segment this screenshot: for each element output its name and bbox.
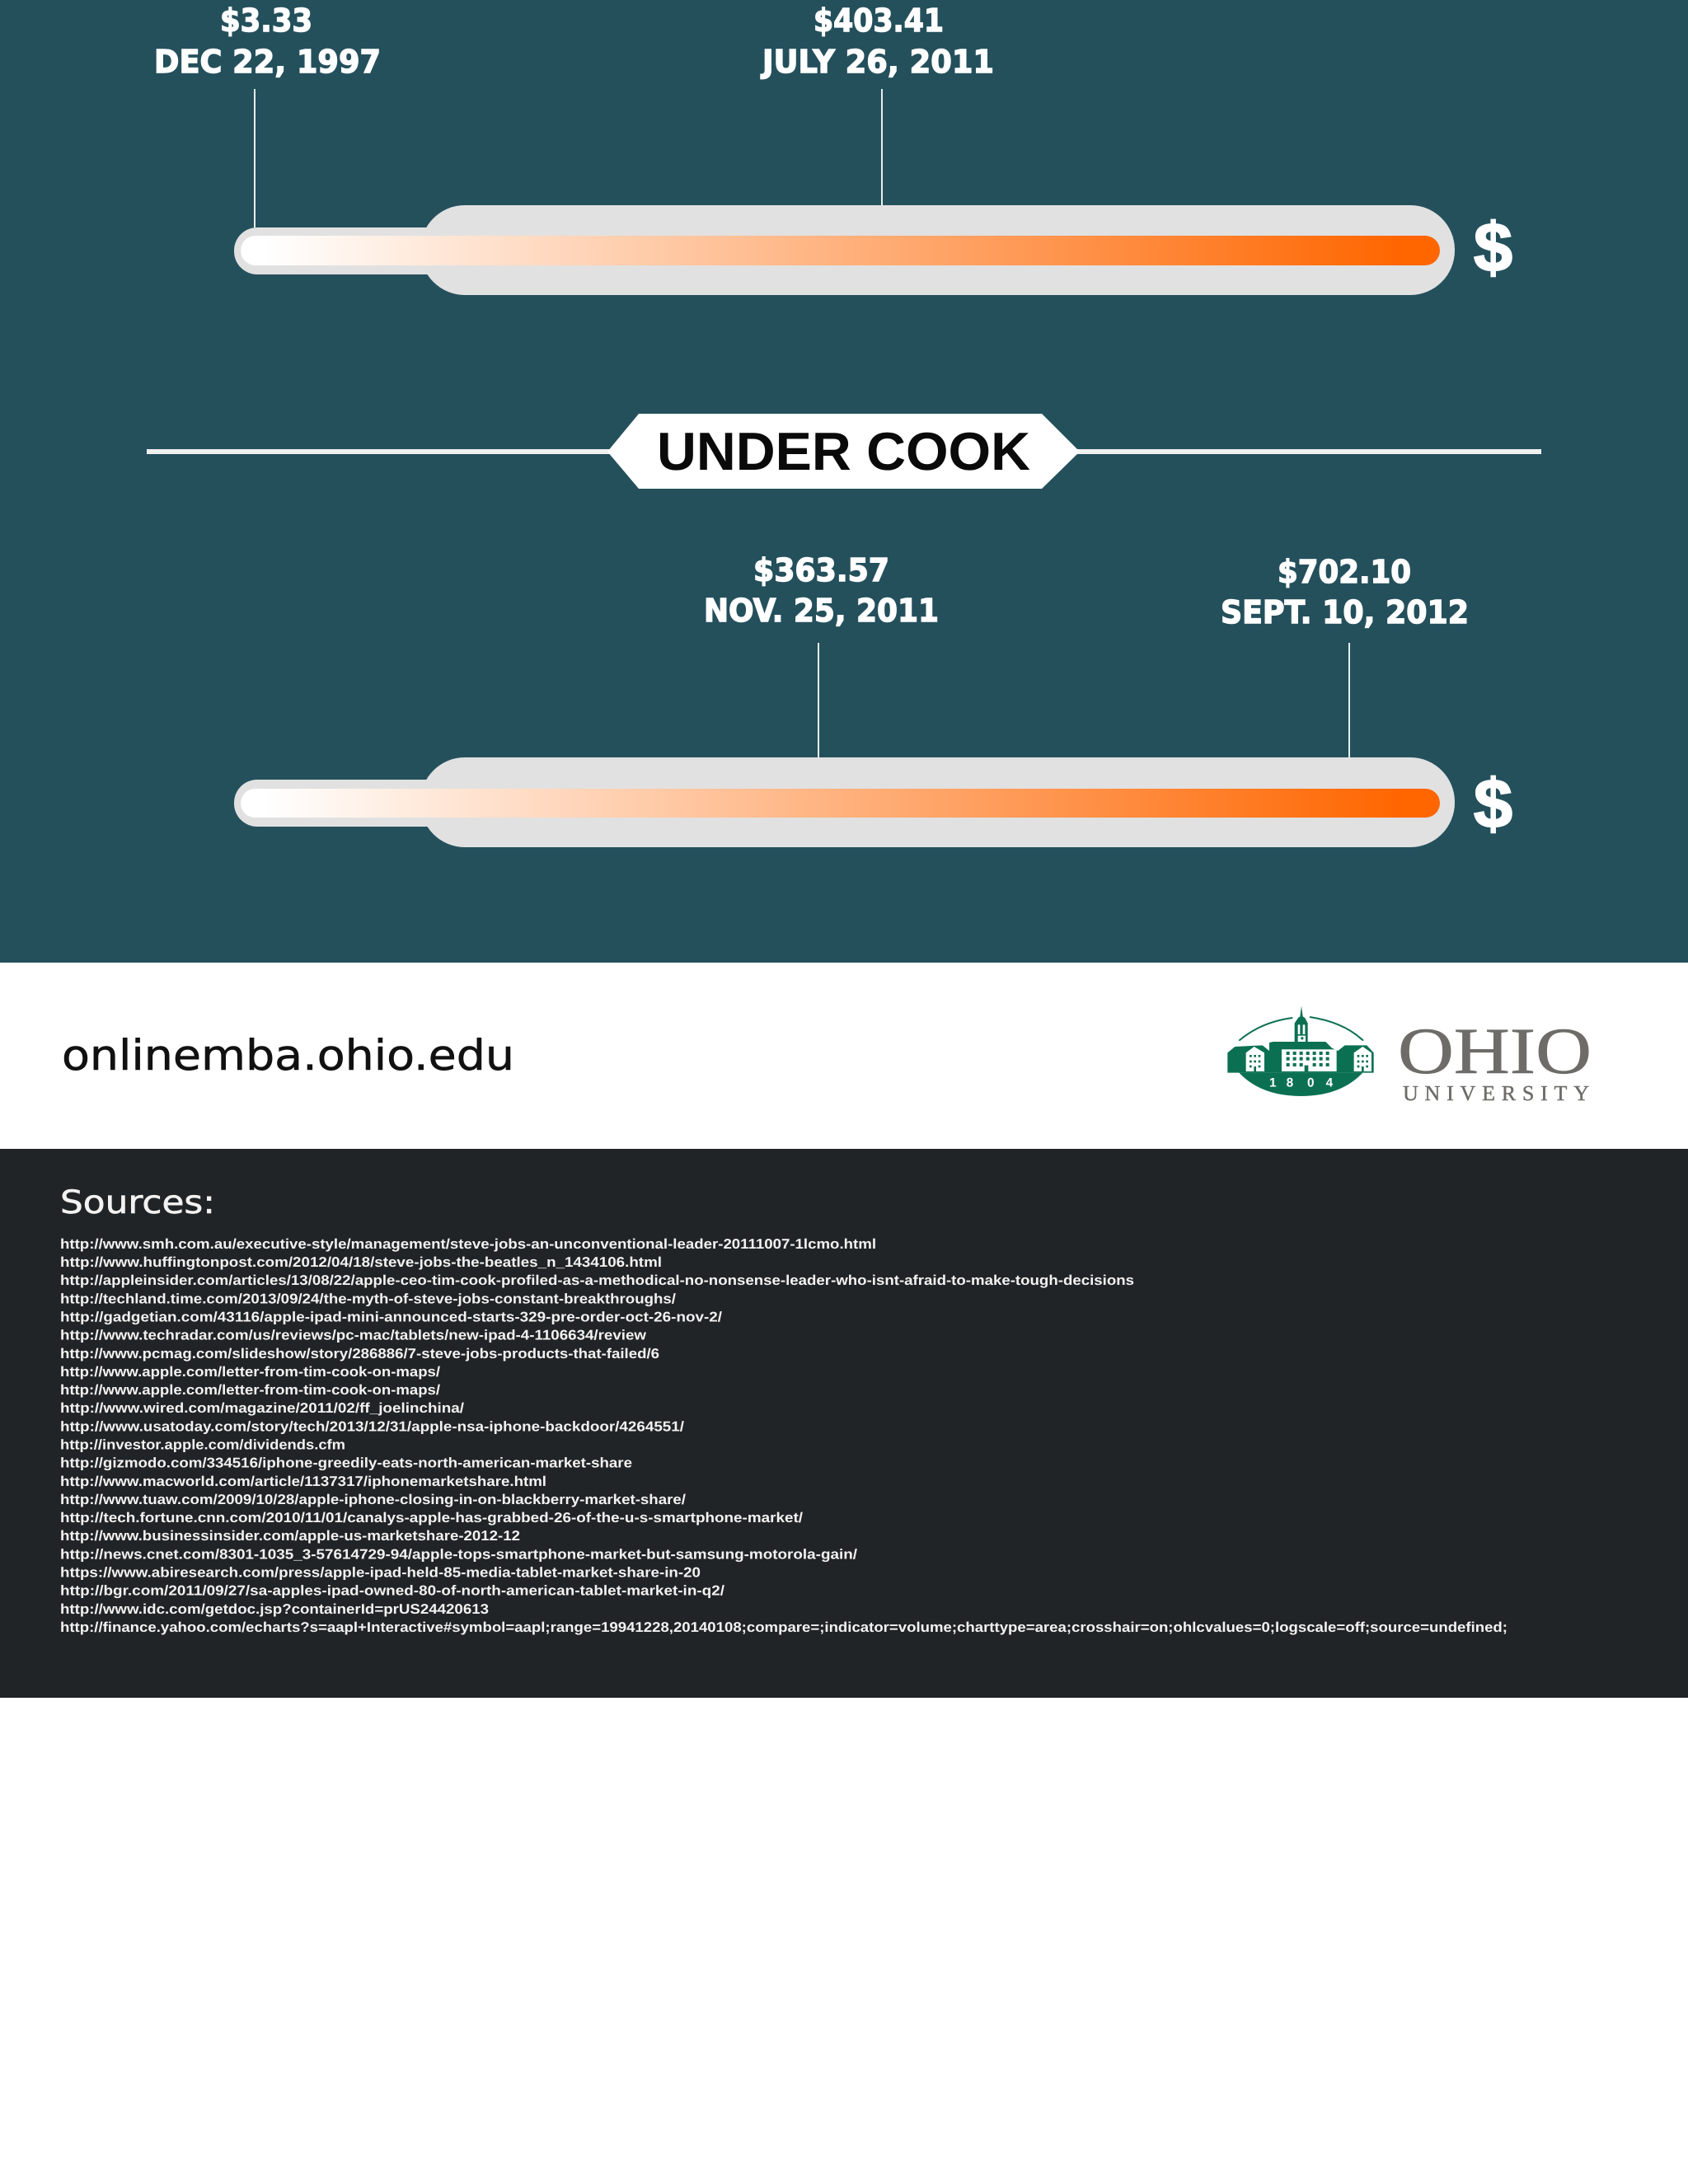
label: $3.33 Dec 22, 1997 [154,2,381,81]
list of source links: http://finance.yahoo.com/echarts?s=aapl+Interactive#symbol=aapl;range=19941228,20140108;compare=;indicator=volume;charttype=area;crosshair=on;ohlcvalues=0;logscale=off;source=undefined; [60,1619,1507,1635]
heading: under Cook [607,414,1080,489]
leader line: 1997 [254,89,256,227]
website address: onlinemba.ohio.edu [62,1032,514,1080]
label: $702.10 Sept. 10, 2012: $702.10 [1278,554,1411,591]
list of source links: https://www.abiresearch.com/press/apple-ipad-held-85-media-tablet-market-share-in-20 [60,1564,701,1581]
list of source links: http://www.idc.com/getdoc.jsp?containerId=prUS24420613 [60,1601,489,1617]
panel: stock price timeline [0,0,1688,963]
list of source links: http://www.apple.com/letter-from-tim-cook-on-maps/ [60,1364,440,1380]
leader line: 2011 [881,89,883,206]
label: $3.33 Dec 22, 1997: $3.33 [220,2,312,40]
list of source links: http://www.huffingtonpost.com/2012/04/18/steve-jobs-the-beatles_n_1434106.html [60,1254,662,1270]
label: $3.33 Dec 22, 1997: DEC 22, 1997 [154,44,381,81]
list of source links: http://gadgetian.com/43116/apple-ipad-mini-announced-starts-329-pre-order-oct-26-nov-2/ [60,1310,722,1325]
label: $403.41 July 26, 2011 [760,2,994,81]
list of source links: http://bgr.com/2011/09/27/sa-apples-ipad-owned-80-of-north-american-tablet-market-in-q2/ [60,1583,724,1599]
list of source links: http://www.wired.com/magazine/2011/02/ff_joelinchina/ [60,1400,464,1416]
label: $363.57 Nov. 25, 2011 [704,552,939,630]
heading: under Cook: UNDER COOK [657,421,1030,481]
icon: dollar sign: $ [1474,765,1512,842]
thermometer bar: under Jobs [234,205,1455,295]
wordmark: OHIO: OHIO [1398,1015,1592,1088]
list of source links: http://www.smh.com.au/executive-style/management/steve-jobs-an-unconventional-leader-20111007-1lcmo.html [60,1236,876,1252]
leader line: 2011 Cook [818,643,819,758]
list of source links: http://appleinsider.com/articles/13/08/22/apple-ceo-tim-cook-profiled-as-a-methodical-no-nonsense-leader-who-isnt-afraid-to-make-tough-decisions [60,1272,1134,1288]
list of source links [60,1236,1507,1635]
icon: dollar sign: $ [1474,209,1512,286]
list of source links: http://tech.fortune.cnn.com/2010/11/01/canalys-apple-has-grabbed-26-of-the-u-s-smartphone-market/ [60,1510,803,1526]
list of source links: http://www.techradar.com/us/reviews/pc-mac/tablets/new-ipad-4-1106634/review [60,1328,647,1343]
label: $403.41 July 26, 2011: JULY 26, 2011 [760,44,994,81]
icon: university seal [1227,1006,1374,1096]
list of source links: http://www.pcmag.com/slideshow/story/286886/7-steve-jobs-products-that-failed/6 [60,1346,659,1361]
logo: Ohio University [1227,1006,1592,1105]
label: $702.10 Sept. 10, 2012 [1221,554,1469,631]
thermometer bar: under Cook [234,757,1455,847]
list of source links: http://www.tuaw.com/2009/10/28/apple-iphone-closing-in-on-blackberry-market-share/ [60,1492,686,1507]
label: $403.41 July 26, 2011: $403.41 [814,2,944,40]
icon: university seal: 1804 [1269,1076,1333,1090]
list of source links: http://www.businessinsider.com/apple-us-marketshare-2012-12 [60,1528,520,1544]
list of source links: http://gizmodo.com/334516/iphone-greedily-eats-north-american-market-share [60,1455,632,1471]
list of source links: http://investor.apple.com/dividends.cfm [60,1437,345,1452]
divider line [147,449,1541,454]
list of source links: http://techland.time.com/2013/09/24/the-myth-of-steve-jobs-constant-breakthroughs/ [60,1291,676,1306]
leader line: 2012 [1348,643,1350,758]
list of source links: http://www.macworld.com/article/1137317/iphonemarketshare.html [60,1474,546,1489]
list of source links: http://www.apple.com/letter-from-tim-cook-on-maps/ [60,1382,440,1398]
label: $702.10 Sept. 10, 2012: SEPT. 10, 2012 [1221,594,1469,631]
panel: sources [0,1149,1688,1698]
list of source links: http://news.cnet.com/8301-1035_3-57614729-94/apple-tops-smartphone-market-but-samsung-motorola-gain/ [60,1546,857,1562]
wordmark: UNIVERSITY: UNIVERSITY [1403,1081,1589,1105]
label: $363.57 Nov. 25, 2011: NOV. 25, 2011 [704,593,939,630]
panel: footer website and logo [0,963,1688,1149]
label: $363.57 Nov. 25, 2011: $363.57 [753,552,889,589]
list of source links: http://www.usatoday.com/story/tech/2013/12/31/apple-nsa-iphone-backdoor/4264551/ [60,1418,684,1434]
heading: sources: Sources: [60,1184,215,1221]
